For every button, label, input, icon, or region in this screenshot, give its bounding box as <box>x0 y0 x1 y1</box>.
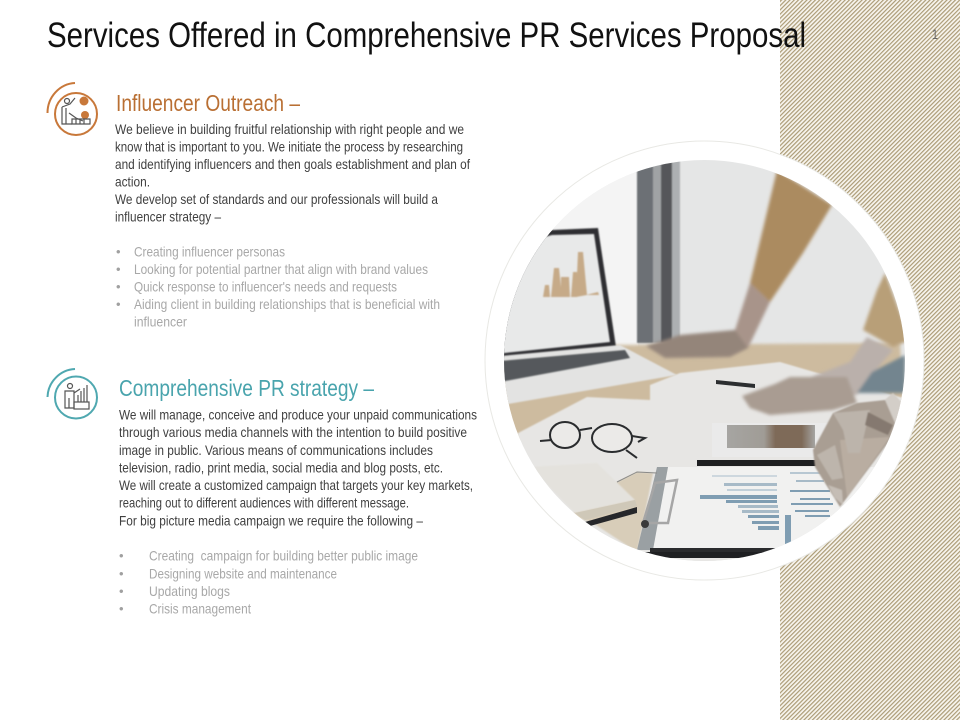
text block: PR strategy description: We will create a customized campaign that targets your key markets, <box>119 477 473 493</box>
bullet list: influencer strategy: influencer <box>134 314 187 330</box>
table <box>500 343 905 440</box>
bullet list: influencer strategy: Aiding client in building relationships that is beneficial with <box>134 296 440 312</box>
clasped hands <box>813 393 902 507</box>
heading: Influencer Outreach: Influencer Outreach – <box>116 90 300 116</box>
text block: influencer description: action. <box>115 174 150 190</box>
text block: influencer description: We develop set of standards and our professionals will build a <box>115 191 438 207</box>
text block: influencer description: We believe in building fruitful relationship with right people and we <box>115 121 464 137</box>
text block: PR strategy description: television, radio, print media, social media and blog posts, etc. <box>119 460 443 476</box>
white ring around photo <box>485 141 924 580</box>
bullet list: influencer strategy: Looking for potential partner that align with brand values <box>134 261 428 277</box>
sleeve and left arm <box>646 170 832 358</box>
bullet list: influencer strategy: • <box>116 279 121 294</box>
wood wedge under notebook <box>570 472 653 552</box>
title: Services Offered in Comprehensive PR Services Proposal <box>47 16 806 55</box>
text block: PR strategy description: through various media channels with the intention to build positive <box>119 424 467 440</box>
bullet list: campaign requirements: Creating campaign for building better public image <box>149 548 418 564</box>
bullet list: campaign requirements: • <box>119 548 124 563</box>
laptop <box>495 228 677 404</box>
window frame <box>637 155 680 343</box>
text block: influencer description: and identifying influencers and then goals establishment and plan of <box>115 156 470 172</box>
bullet list: campaign requirements: Designing website and maintenance <box>149 566 337 582</box>
bullet list: influencer strategy: Creating influencer personas <box>134 244 285 260</box>
text block: influencer description: know that is important to you. We initiate the process by researching <box>115 138 463 154</box>
bullet list: influencer strategy: • <box>116 262 121 276</box>
page number: 1 <box>932 26 938 42</box>
window light <box>553 172 638 344</box>
text block: influencer description: influencer strategy – <box>115 208 221 224</box>
bullet list: campaign requirements: Crisis management <box>149 600 251 616</box>
tablet <box>712 423 830 457</box>
icon: influencer outreach <box>47 83 97 135</box>
bullet list: campaign requirements <box>119 548 418 616</box>
black pen <box>697 460 816 466</box>
right sleeve and arm <box>742 273 910 415</box>
photo: desk with laptop, glasses, clipboard and hands <box>495 155 910 570</box>
text block: PR strategy description: image in public. Various means of communications includes <box>119 442 433 458</box>
notebook <box>574 482 635 513</box>
laptop chart <box>543 252 599 297</box>
bullet list: influencer strategy: Quick response to influencer's needs and requests <box>134 278 397 294</box>
bullet list: influencer strategy: • <box>116 296 121 312</box>
clip <box>643 480 677 523</box>
text block: PR strategy description: reaching out to different audiences with different message. <box>119 494 409 510</box>
bullet list: campaign requirements: • <box>119 584 124 598</box>
text block: PR strategy description: We will manage, conceive and produce your unpaid communications <box>119 406 477 422</box>
bullet list: campaign requirements: Updating blogs <box>149 583 230 599</box>
bullet list: influencer strategy: • <box>116 244 121 259</box>
icon: PR strategy <box>48 369 97 418</box>
hatched side band <box>780 0 960 720</box>
glasses <box>540 422 645 458</box>
bullet list: campaign requirements: • <box>119 566 124 581</box>
heading: Comprehensive PR strategy: Comprehensive PR strategy – <box>119 375 374 401</box>
text block: influencer description <box>115 121 470 224</box>
text block: PR strategy description <box>119 406 477 528</box>
bullet list: influencer strategy <box>116 244 440 330</box>
pen on desk <box>716 380 755 388</box>
papers on desk <box>518 361 902 440</box>
clipboard <box>616 467 874 558</box>
text block: PR strategy description: For big picture media campaign we require the following – <box>119 512 423 528</box>
bar chart on clipboard <box>700 472 833 545</box>
bullet list: campaign requirements: • <box>119 601 124 616</box>
